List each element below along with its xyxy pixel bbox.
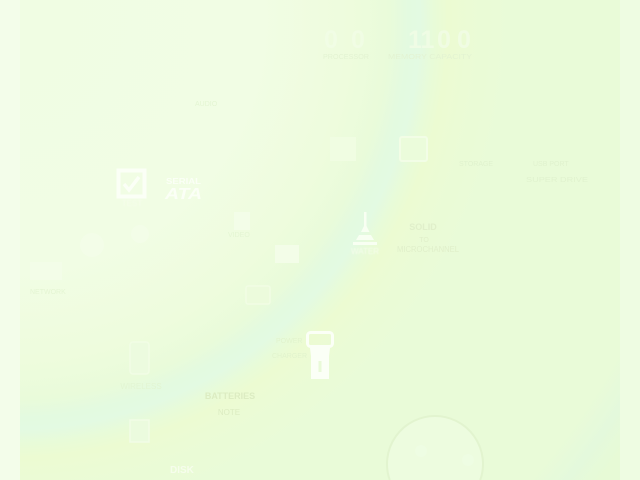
icon: white flask <box>353 212 377 245</box>
countdown digits <box>324 26 471 54</box>
right column labels: STORAGE <box>459 161 493 168</box>
left cluster icons <box>30 212 299 280</box>
center label block: TO <box>419 237 429 244</box>
center label block: MICROCHANNEL <box>397 245 460 254</box>
circle badge <box>387 416 483 480</box>
countdown captions: PROCESSOR <box>323 54 369 61</box>
center bottom label: BATTERIES <box>205 391 255 401</box>
left cluster captions <box>30 101 250 296</box>
left cluster captions: AUDIO <box>195 101 218 108</box>
flashlight side labels <box>272 338 307 360</box>
small icon: center left box <box>246 286 270 304</box>
countdown digits: 0 <box>324 26 338 54</box>
countdown captions: MEMORY CAPACITY <box>388 54 472 61</box>
flashlight side labels: CHARGER <box>272 353 307 360</box>
left cluster captions: NETWORK <box>30 289 66 296</box>
right column labels <box>459 161 588 184</box>
right column labels: SUPER DRIVE <box>526 177 588 184</box>
pale box left of center <box>330 137 356 161</box>
phone caption: WIRELESS <box>120 382 162 391</box>
icon: white checkbox <box>118 170 144 196</box>
icon: phone <box>130 342 149 374</box>
white label: ATA: SERIAL <box>166 177 201 186</box>
center bottom label <box>205 391 255 417</box>
countdown digits: 0 <box>437 26 451 54</box>
center label block: SOLID <box>409 222 437 232</box>
center bottom label: NOTE <box>218 408 240 417</box>
icon: small tablet <box>130 420 149 442</box>
icon: top right box <box>400 137 427 161</box>
countdown digits: 0 <box>457 26 471 54</box>
countdown digits: 11 <box>408 26 435 54</box>
countdown captions <box>323 54 472 61</box>
countdown digits: 0 <box>351 26 365 54</box>
flashlight side labels: POWER <box>276 338 302 345</box>
flask caption: WATER <box>351 247 379 256</box>
center label block <box>397 222 460 254</box>
white label: ATA: ATA <box>164 186 202 203</box>
right column labels: USB PORT <box>533 161 569 168</box>
checkbox caption: TEST <box>122 199 142 208</box>
left cluster captions: VIDEO <box>228 232 250 239</box>
white label: ATA <box>164 177 202 203</box>
icon: white flashlight <box>308 332 332 379</box>
bottom left label: DISK <box>170 465 195 476</box>
